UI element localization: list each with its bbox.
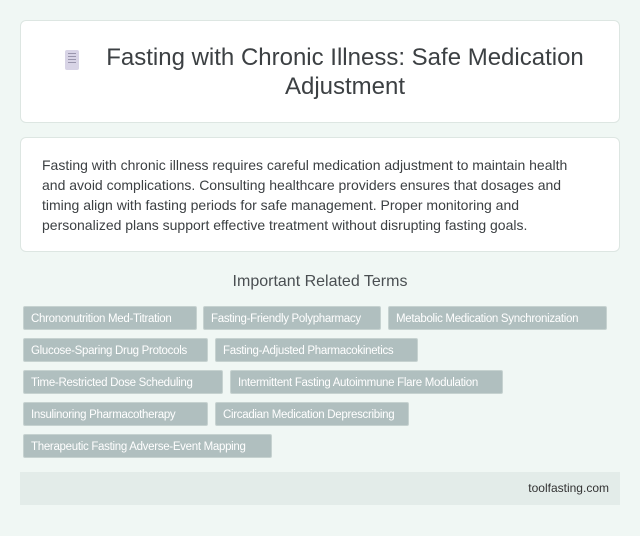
tags: Chrononutrition Med-Titration bbox=[31, 313, 171, 325]
tags: Circadian Medication Deprescribing bbox=[223, 409, 394, 421]
title: Adjustment bbox=[285, 73, 405, 100]
description text: and avoid complications. Consulting healthcare providers ensures that dosages and bbox=[42, 177, 561, 193]
tags: Fasting-Friendly Polypharmacy bbox=[211, 313, 361, 325]
tags: Intermittent Fasting Autoimmune Flare Modulation bbox=[238, 377, 478, 389]
title: Fasting with Chronic Illness: Safe Medication bbox=[106, 44, 584, 71]
description card bbox=[20, 137, 620, 252]
tags: Fasting-Adjusted Pharmacokinetics bbox=[223, 345, 393, 357]
tags: Glucose-Sparing Drug Protocols bbox=[31, 345, 187, 357]
footer bbox=[20, 472, 620, 505]
tags: Therapeutic Fasting Adverse-Event Mapping bbox=[31, 441, 246, 453]
icon: document bbox=[65, 50, 79, 70]
heading: related terms: Important Related Terms bbox=[233, 273, 407, 290]
description text: Fasting with chronic illness requires careful medication adjustment to maintain health bbox=[42, 157, 567, 173]
title bbox=[106, 44, 584, 100]
description text: timing align with fasting periods for safe management. Proper monitoring and bbox=[42, 197, 519, 213]
description text bbox=[42, 157, 567, 233]
tags: Insulinoring Pharmacotherapy bbox=[31, 409, 175, 421]
tags: Time-Restricted Dose Scheduling bbox=[31, 377, 193, 389]
title card bbox=[20, 20, 620, 123]
tags: Metabolic Medication Synchronization bbox=[396, 313, 578, 325]
description text: personalized plans support effective treatment without disrupting fasting goals. bbox=[42, 217, 527, 233]
footer: toolfasting.com bbox=[528, 481, 609, 495]
